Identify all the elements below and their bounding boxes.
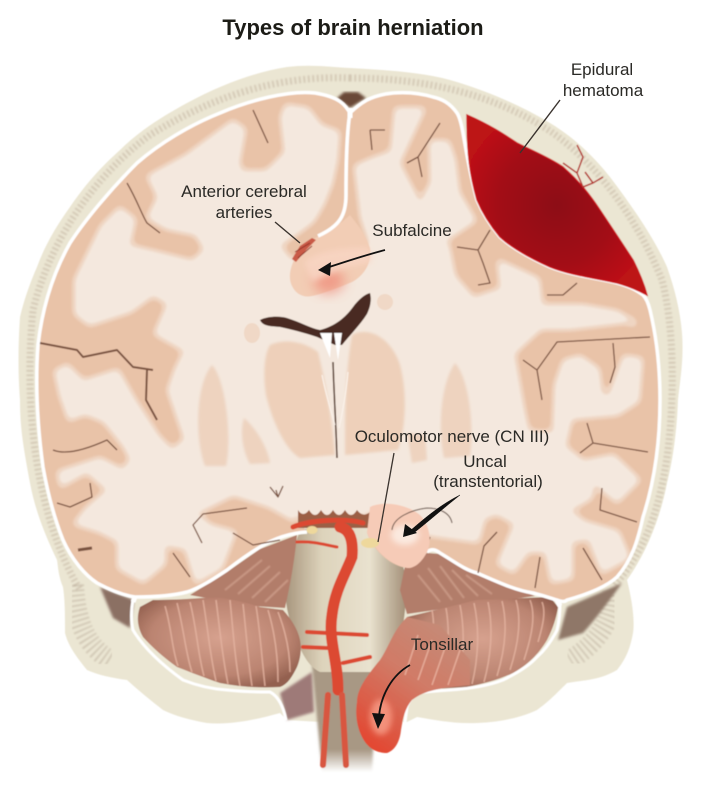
label: Anterior cerebral arteries: Anterior cerebral bbox=[181, 182, 307, 201]
label: Uncal (transtentorial) with arrow: Uncal bbox=[463, 452, 507, 471]
epidural hematoma bbox=[467, 115, 647, 295]
dark space above midbrain bbox=[298, 510, 372, 528]
cerebellum left bbox=[132, 535, 301, 720]
arteries bbox=[293, 520, 370, 765]
sulci dark lines bbox=[40, 110, 650, 588]
label: Tonsillar with arrow bbox=[372, 635, 474, 729]
label: Epidural hematoma: hematoma bbox=[563, 81, 644, 100]
cerebellum right bbox=[400, 553, 560, 722]
anterior cerebral arteries bbox=[292, 238, 316, 262]
oculomotor nerves bbox=[306, 526, 379, 548]
title: Types of brain herniation bbox=[222, 15, 484, 40]
label: Anterior cerebral arteries: arteries bbox=[216, 203, 272, 222]
label: Epidural hematoma bbox=[520, 60, 644, 153]
label: Epidural hematoma: Epidural bbox=[571, 60, 633, 79]
label: Uncal (transtentorial) with arrow bbox=[403, 452, 543, 537]
tonsillar herniation bbox=[356, 617, 470, 753]
dark sinus triangles bbox=[100, 92, 622, 720]
label: Subfalcine with arrow: Subfalcine bbox=[372, 221, 452, 240]
label: Oculomotor nerve with leader bbox=[355, 427, 549, 542]
label: Anterior cerebral arteries bbox=[181, 182, 307, 243]
label: Subfalcine with arrow bbox=[318, 221, 452, 276]
label: Uncal (transtentorial) with arrow: (transtentorial) bbox=[433, 472, 543, 491]
label: Oculomotor nerve with leader: Oculomotor nerve (CN III) bbox=[355, 427, 549, 446]
cerebrum tissue and dura outline bbox=[37, 92, 660, 606]
deep brain structures bbox=[198, 293, 471, 466]
label: Tonsillar with arrow: Tonsillar bbox=[411, 635, 474, 654]
subfalcine herniated tissue and falx bbox=[290, 108, 372, 297]
uncal herniation bbox=[367, 504, 452, 568]
spinal cord and brainstem bbox=[286, 520, 406, 772]
skull bone bbox=[18, 66, 683, 723]
